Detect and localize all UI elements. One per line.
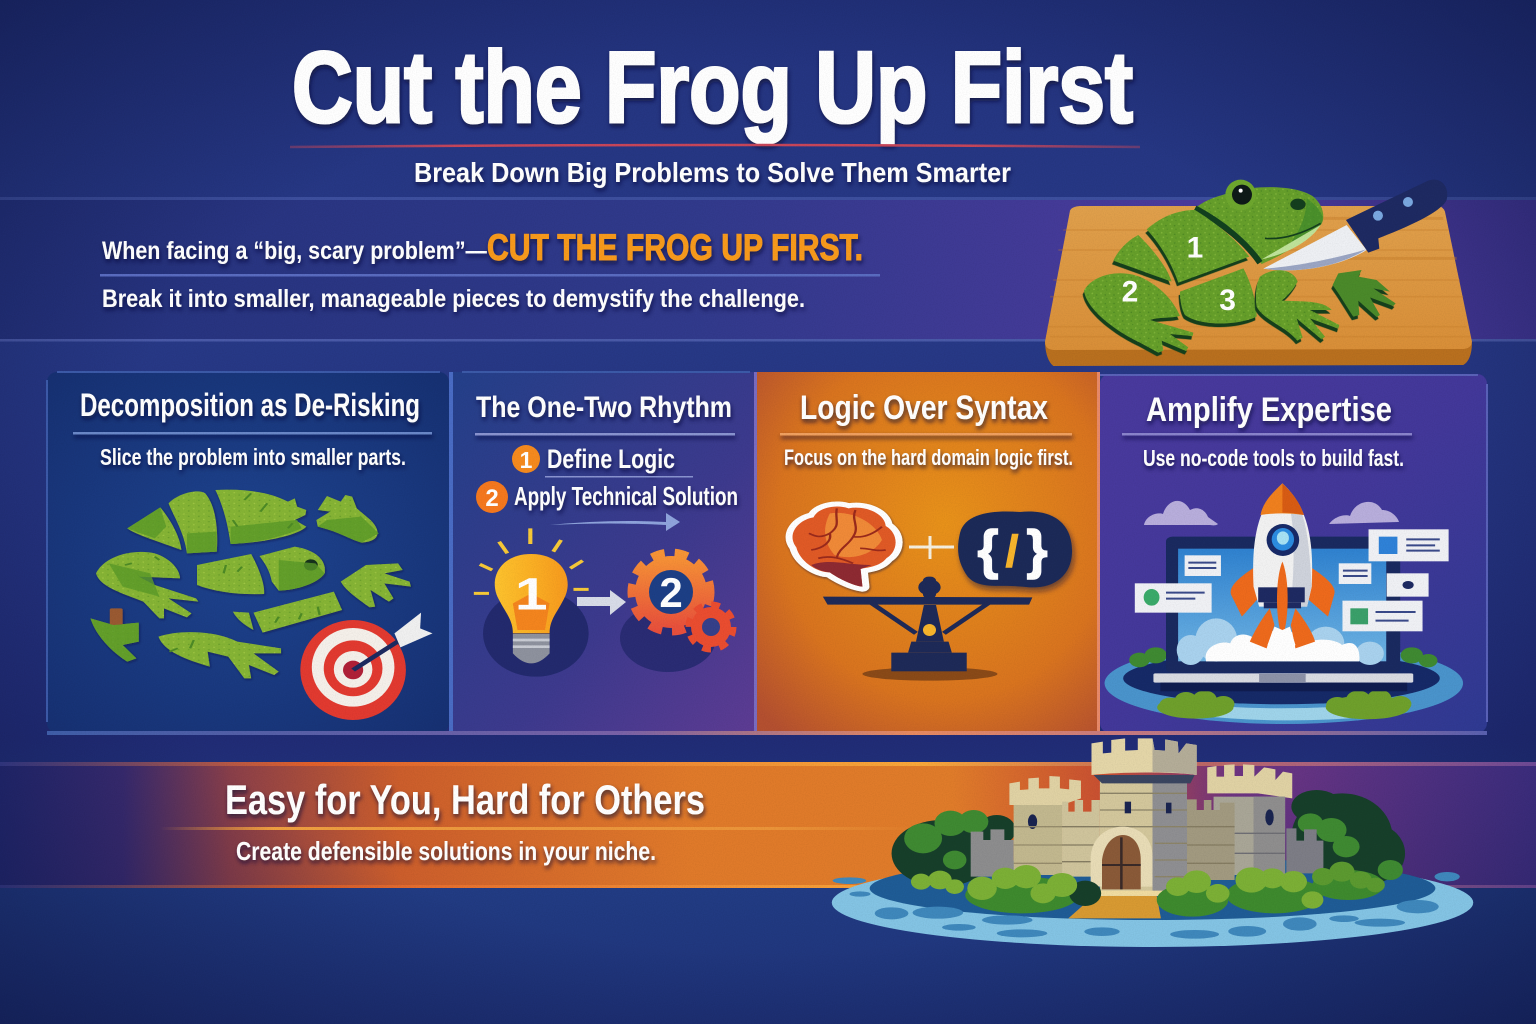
knife [1263,180,1447,270]
step 1: define logic: 1 [520,447,533,473]
heading: decomposition: Decomposition as De-Risking [80,387,420,423]
bottom subtitle: Create defensible solutions in your niche. [236,836,656,866]
frog severed foot [1333,270,1396,317]
icon: brain [793,506,896,587]
laptop [1153,537,1413,691]
frog piece 2 with leg [1084,273,1193,353]
intro text block: Break it into smaller, manageable pieces to demystify the challenge. [102,285,805,313]
frog front leg [1256,270,1339,341]
frog piece 1 [1147,210,1249,283]
heading: decomposition: Slice the problem into smaller parts. [100,444,406,470]
frog piece 1: 1 [1187,232,1203,265]
clouds and smoke [1177,618,1384,665]
icon: code badge: { [977,520,999,580]
heading: amplify expertise [1122,391,1412,471]
plus sign [909,536,954,559]
frog piece 3: 3 [1219,284,1236,317]
intro text block: When facing a “big, scary problem”— [102,237,487,265]
clouds [1144,501,1399,525]
heading: logic over syntax: Logic Over Syntax [800,389,1048,427]
illustration: frog pieces [91,490,411,678]
title underline [290,145,1140,147]
icon: balance scale [823,577,1032,681]
step 2: apply technical solution [476,481,738,513]
icon: code badge [958,511,1072,587]
illustration: castle on moat island [832,738,1473,947]
heading: amplify expertise: Amplify Expertise [1146,391,1392,429]
rocket [1231,483,1335,654]
intro band background [0,197,1536,342]
bottom band background [0,762,1536,888]
water pool [1105,643,1463,724]
floating UI cards [1135,529,1449,631]
intro text block: CUT THE FROG UP FIRST. [487,227,863,268]
right tower [1207,764,1292,875]
step 2: apply technical solution: 2 [485,485,499,512]
bottom heading rule [160,827,920,830]
panel: decomposition background [47,372,449,733]
bushes [1129,647,1437,719]
icon: code badge: } [1026,520,1048,580]
icon: target with arrow [300,613,433,720]
connecting walls [1062,799,1235,880]
panel: logic over syntax background [757,372,1099,733]
panels container [47,372,1487,735]
front bushes [911,862,1385,917]
step 1: define logic: Define Logic [547,444,675,474]
heading: decomposition [73,387,432,470]
heading: logic over syntax [780,389,1073,470]
moat [832,857,1473,947]
heading: easy for you, hard for others: Easy for You, Hard for Others [225,776,705,823]
frog piece 3 [1180,268,1257,323]
illustration: frog on cutting board [1045,180,1472,366]
icon: light bulb: 1 [515,570,548,620]
step 2: apply technical solution: Apply Technical Solution [514,481,738,511]
step 1: define logic [512,444,693,478]
trees behind [892,790,1405,887]
title: Cut the Frog Up First [292,32,1133,144]
side walls [971,828,1323,877]
arrow: flow [550,513,680,531]
intro text block [100,227,880,313]
panel: one-two rhythm background [452,372,756,733]
subtitle: Break Down Big Problems to Solve Them Smarter [414,157,1011,188]
illustration: rocket launching from laptop on island [1105,483,1463,724]
icon: gears: 2 [659,569,683,616]
heading: amplify expertise: Use no-code tools to build fast. [1143,445,1404,471]
icon: code badge: / [1006,527,1018,576]
frog piece 2 with leg: 2 [1122,276,1138,309]
panel: amplify expertise background [1100,374,1487,733]
main keep [1091,738,1197,896]
heading: one-two rhythm: The One-Two Rhythm [476,391,732,424]
arrow: bulb to gear [577,590,626,615]
frog head [1195,180,1323,264]
cutting board [1045,206,1472,366]
icon: gears [620,554,732,672]
frog shoulder piece [1113,235,1172,282]
heading: logic over syntax: Focus on the hard domain logic first. [784,445,1073,470]
path [1068,896,1161,918]
icon: light bulb [474,528,589,677]
left tower [1009,776,1081,875]
